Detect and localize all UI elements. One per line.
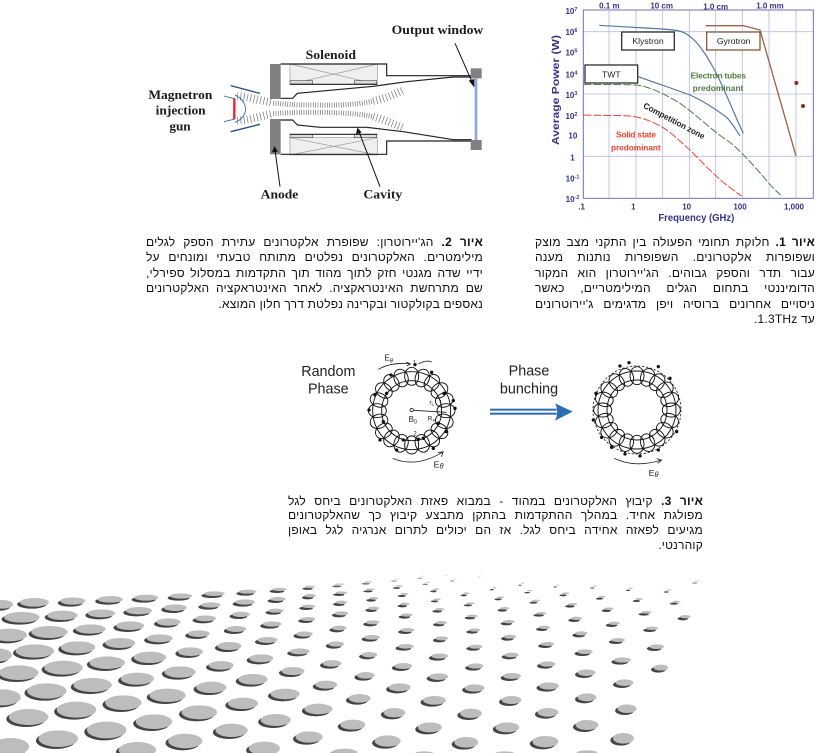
label: Solenoid: Solenoid [306, 47, 357, 62]
label: Random Phase: Random [301, 364, 355, 380]
top wavelength labels: 1.0 cm [703, 2, 728, 11]
label: Random Phase: Phase [308, 382, 349, 398]
y axis tick labels: 5 [574, 49, 577, 55]
y axis tick labels: 10 [565, 28, 574, 37]
region label: electron tubes: predominant [693, 83, 744, 93]
caption: figure 2: ידיי שדה מגנטי חזק לתוך מהוד תוך התקדמות במסלול ספירלי, [146, 266, 483, 280]
y axis tick labels: 4 [574, 70, 577, 76]
top wavelength labels [599, 1, 784, 11]
E theta label top: E [384, 354, 390, 363]
y axis title: Average Power (W) [551, 35, 562, 145]
E theta label right: θ [654, 470, 658, 479]
electron tube limit dashed curve [583, 84, 781, 195]
plot grid [583, 10, 813, 198]
dot shadows [0, 575, 697, 753]
arrow: phase bunching [490, 403, 573, 421]
ring labels: r [429, 400, 432, 407]
caption: figure 3: מגיעים לפאזה אחידה ביחס לגל. אז הם יכולים לתרום אנרגיה לגל באופן [288, 523, 703, 537]
y axis tick labels: 10 [565, 91, 574, 100]
y axis tick labels: 10 [565, 49, 574, 58]
label box: TWT [585, 65, 638, 83]
y axis tick labels: 7 [574, 7, 577, 13]
top E field arrow [378, 361, 432, 369]
y axis tick labels: 10 [566, 195, 575, 204]
klystron curve [599, 25, 743, 133]
label: Magnetron injection gun: gun [169, 118, 191, 133]
electrons at random positions [367, 363, 457, 452]
label: Magnetron injection gun [148, 87, 213, 133]
E theta label right: E [649, 468, 654, 478]
caption: figure 2: מילימטרים. האלקטרונים נפלטים מתותח טבעתי ומונחים על [146, 250, 483, 264]
top wavelength labels: 10 cm [650, 1, 673, 10]
caption: figure 3: מפולגת אחיד. במהלך ההתקדמות בהתקן מתבצע קיבוץ כך שהאלקטרונים [288, 508, 703, 522]
caption: figure 2 [146, 234, 483, 311]
x axis title: Frequency (GHz) [658, 213, 734, 224]
label: Output window: Output window [392, 22, 484, 37]
top wavelength labels: 0.1 m [599, 1, 620, 10]
random phase ring [367, 360, 457, 454]
diagram: phase bunching [301, 354, 682, 479]
label box: Gyrotron: Gyrotron [717, 36, 751, 46]
x axis tick labels: 1,000 [784, 203, 805, 212]
label box: Klystron [622, 32, 674, 50]
caption: figure 2: שם מתרחשת האינטראקציה. לאחר האינטראקציה האלקטרונים [146, 281, 483, 295]
E theta label bottom: E [434, 459, 439, 469]
ring labels: B [409, 415, 414, 424]
dot tops [0, 573, 700, 753]
experimental data points [794, 81, 805, 108]
y axis tick labels [565, 7, 579, 204]
arrow: cavity [356, 128, 380, 187]
bunched phase ring [592, 361, 681, 458]
solid state dashed curve [583, 115, 742, 196]
y axis tick labels: 6 [574, 28, 577, 34]
output window [471, 68, 482, 150]
label: Anode: Anode [261, 187, 299, 202]
x axis tick labels: 10 [682, 203, 692, 212]
ring labels: 2 [413, 431, 417, 437]
label: Cavity: Cavity [363, 187, 403, 202]
y axis tick labels: 10 [566, 175, 575, 184]
y axis tick labels: 10 [568, 132, 578, 141]
region label: solid state [611, 130, 661, 152]
fade at the far edge of the dot field [0, 570, 816, 591]
caption: figure 1: ניסויים אחרונים ברוסיה ויפן מדגימים ג'יירוטרונים [535, 297, 815, 311]
x axis tick labels [578, 203, 805, 212]
x axis tick labels: .1 [578, 203, 586, 212]
ring labels [409, 360, 435, 437]
region label: competition zone: Competition zone [642, 100, 707, 141]
caption: figure 3 [288, 494, 703, 552]
caption: figure 1: ושפופרות אלקטרונים. השפופרות נותנות מענה [535, 250, 815, 264]
decorative perspective dot field [0, 574, 700, 753]
bottom E field arrow right [614, 458, 662, 464]
label: Phase bunching: bunching [500, 381, 558, 397]
caption: figure 3: קוהרנטי. [658, 538, 703, 552]
caption: figure 1: עד 1.3THz. [754, 312, 815, 326]
x axis tick labels: 100 [733, 203, 747, 212]
y axis tick labels: -1 [575, 175, 579, 181]
label box: Gyrotron [707, 32, 760, 50]
E theta label bottom: θ [439, 461, 443, 470]
magnetron injection gun [224, 86, 260, 132]
E theta label top: θ [390, 358, 394, 364]
radius line and centre [410, 400, 447, 412]
diagram: gyrotron cross section [148, 22, 484, 202]
caption: figure 3: איור 3. קיבוץ האלקטרונים במהוד - במבוא פאזת האלקטרונים ביחס לגל [288, 494, 703, 508]
TWT curve [638, 77, 740, 136]
label: Magnetron injection gun: injection [156, 103, 206, 118]
region label: solid state: predominant [611, 142, 661, 152]
caption: figure 2: נאספים בקולקטור ובקרינה נפלטת דרך חלון המוצא. [218, 297, 483, 311]
caption: figure 1: הדומיננטי בתחום הגלים המילימטריים, כאשר [535, 281, 815, 295]
region label: electron tubes: Electron tubes [691, 71, 746, 81]
electron beam spiral [237, 90, 403, 128]
arrow: anode [272, 146, 280, 187]
ring labels: e [432, 418, 435, 423]
y axis tick labels: 3 [574, 91, 577, 97]
y axis tick labels: 1 [570, 153, 575, 162]
bottom E field arrow [393, 452, 443, 462]
caption: figure 1: עבור תדר והספק גבוהים. הג'יירוטרון הוא המקור [535, 266, 815, 280]
arrow: output window [455, 43, 474, 87]
region label: solid state: Solid state [616, 130, 656, 140]
cavity inserts [290, 81, 377, 138]
anode blocks [270, 64, 281, 154]
y axis tick labels: 10 [565, 70, 574, 79]
label box: Klystron: Klystron [632, 36, 664, 46]
y axis tick labels: 10 [565, 112, 574, 121]
ring labels: L [432, 402, 435, 407]
label: Magnetron injection gun: Magnetron [148, 87, 213, 102]
region label: electron tubes [691, 71, 746, 93]
label: Phase bunching: Phase [509, 363, 549, 379]
solenoid coils [290, 64, 377, 155]
y axis tick labels: -2 [575, 195, 579, 201]
y axis tick labels: 2 [574, 112, 577, 118]
ring labels: 1 [413, 360, 416, 366]
ring labels: 0 [414, 419, 417, 425]
x axis tick labels: 1 [631, 203, 636, 212]
tube outline [281, 64, 472, 154]
label: Phase bunching [500, 363, 558, 397]
chart: average power versus frequency [551, 1, 814, 224]
gyrotron curve [706, 26, 796, 156]
bunched electrons [592, 361, 678, 458]
label box: TWT: TWT [602, 69, 621, 79]
caption: figure 2: איור 2. הג'יירוטרון: שפופרת אלקטרונים עתירת הספק לגלים [146, 234, 483, 248]
ring labels: R [428, 416, 432, 423]
caption: figure 1 [535, 234, 815, 326]
top wavelength labels: 1.0 mm [756, 2, 784, 11]
caption: figure 1: איור 1. חלוקת תחומי הפעולה בין התקני מצב מוצק [535, 234, 815, 248]
y axis tick labels: 10 [565, 7, 574, 16]
label: Random Phase [301, 364, 355, 398]
